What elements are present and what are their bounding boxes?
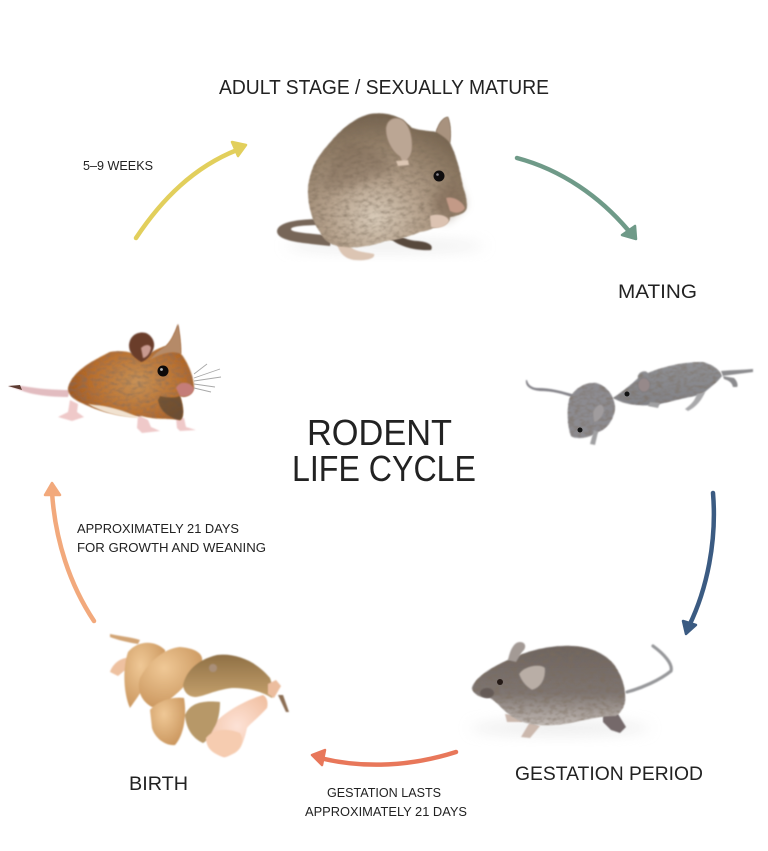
illustration: pregnant grey mouse [470,642,671,738]
arrow: red-orange, gestation to birth [312,750,456,765]
arrow: peach, birth to weaning [45,483,94,621]
label: growth and weaning: FOR GROWTH AND WEANING [77,540,266,555]
title: RODENT [307,412,452,453]
label: gestation lasts: APPROXIMATELY 21 DAYS [305,804,467,819]
label: 5–9 weeks: 5–9 WEEKS [83,158,153,173]
heading: adult stage: ADULT STAGE / SEXUALLY MATURE [219,77,549,99]
label: gestation lasts: GESTATION LASTS [327,785,441,800]
illustration: two grey mice mating [526,362,753,445]
illustration: young orange mouse [8,324,221,433]
label: growth and weaning [77,521,266,555]
arrow: green, adult to mating [517,158,636,239]
label: growth and weaning: APPROXIMATELY 21 DAYS [77,521,239,536]
illustration: adult brown mouse [277,113,485,260]
illustration: litter of newborn pups [110,634,289,757]
heading: mating: MATING [618,282,697,303]
arrow: blue, mating to gestation [683,493,714,634]
title [292,412,476,489]
heading: birth: BIRTH [129,773,188,795]
arrow: yellow, growth to adult [136,142,246,238]
title: LIFE CYCLE [292,448,476,489]
label: gestation lasts [305,785,467,819]
heading: gestation period: GESTATION PERIOD [515,763,703,785]
